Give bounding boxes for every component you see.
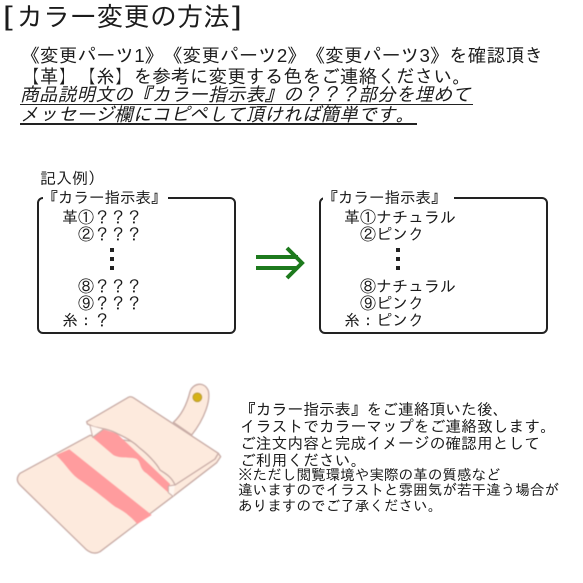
text block: explanation: ご利用ください。: [240, 453, 366, 470]
text block: instructions: [20, 45, 543, 125]
label: example: 記入例）: [40, 171, 104, 188]
text block: explanation: ご注文内容と完成イメージの確認用として: [240, 436, 540, 453]
text block: explanation: ※ただし閲覧環境や実際の革の質感など: [238, 468, 501, 484]
text block: explanation: イラストでカラーマップをご連絡致します。: [240, 419, 556, 436]
lower corner fold: [168, 485, 175, 497]
list of filled rows: ②ピンク: [360, 227, 424, 244]
text block: explanation: 違いますのでイラストと雰囲気が若干違う場合が: [238, 483, 559, 499]
pink band 2: [93, 429, 170, 493]
pink band 1: [56, 449, 152, 524]
list of placeholder rows: [62, 209, 142, 330]
title: カラー変更の方法: [16, 2, 230, 32]
list of filled rows: ⑨ピンク: [360, 296, 424, 313]
title: [: [3, 1, 13, 31]
panel: example form after: [319, 197, 548, 334]
arrow: [256, 246, 305, 280]
text block: explanation: 『カラー指示表』をご連絡頂いた後、: [240, 402, 509, 419]
strap with snap: [173, 384, 209, 435]
list of placeholder rows: 革①？？？: [62, 210, 142, 227]
wallet base: [17, 435, 221, 553]
illustration: wallet: [16, 383, 222, 554]
box heading: 『カラー指示表』: [322, 190, 446, 207]
text block: explanation: ありますのでご了承ください。: [238, 499, 442, 515]
text block: explanation: [238, 402, 559, 515]
list of filled rows: 糸：ピンク: [344, 313, 424, 330]
list of filled rows: [344, 209, 456, 330]
list of placeholder rows: ②？？？: [78, 227, 142, 244]
list of filled rows: 革①ナチュラル: [344, 210, 456, 227]
upper flap: [87, 397, 218, 485]
text block: instructions: 商品説明文の『カラー指示表』の？？？部分を埋めて: [20, 84, 471, 105]
list of placeholder rows: ⑧？？？: [78, 279, 142, 296]
text block: instructions: メッセージ欄にコピペして頂ければ簡単です。: [20, 104, 414, 125]
box heading: 『カラー指示表』: [42, 190, 166, 207]
title: ]: [232, 1, 242, 31]
list of filled rows: ⑧ナチュラル: [360, 279, 456, 296]
text block: instructions: 【革】【糸】を参考に変更する色をご連絡ください。: [21, 66, 471, 87]
text block: instructions: 《変更パーツ1》《変更パーツ2》《変更パーツ3》を確認頂き: [21, 45, 543, 66]
flap inner edge: [90, 426, 103, 437]
panel: example form before: [37, 197, 236, 334]
list of placeholder rows: ⑨？？？: [78, 296, 142, 313]
list of placeholder rows: 糸：？: [62, 313, 110, 330]
